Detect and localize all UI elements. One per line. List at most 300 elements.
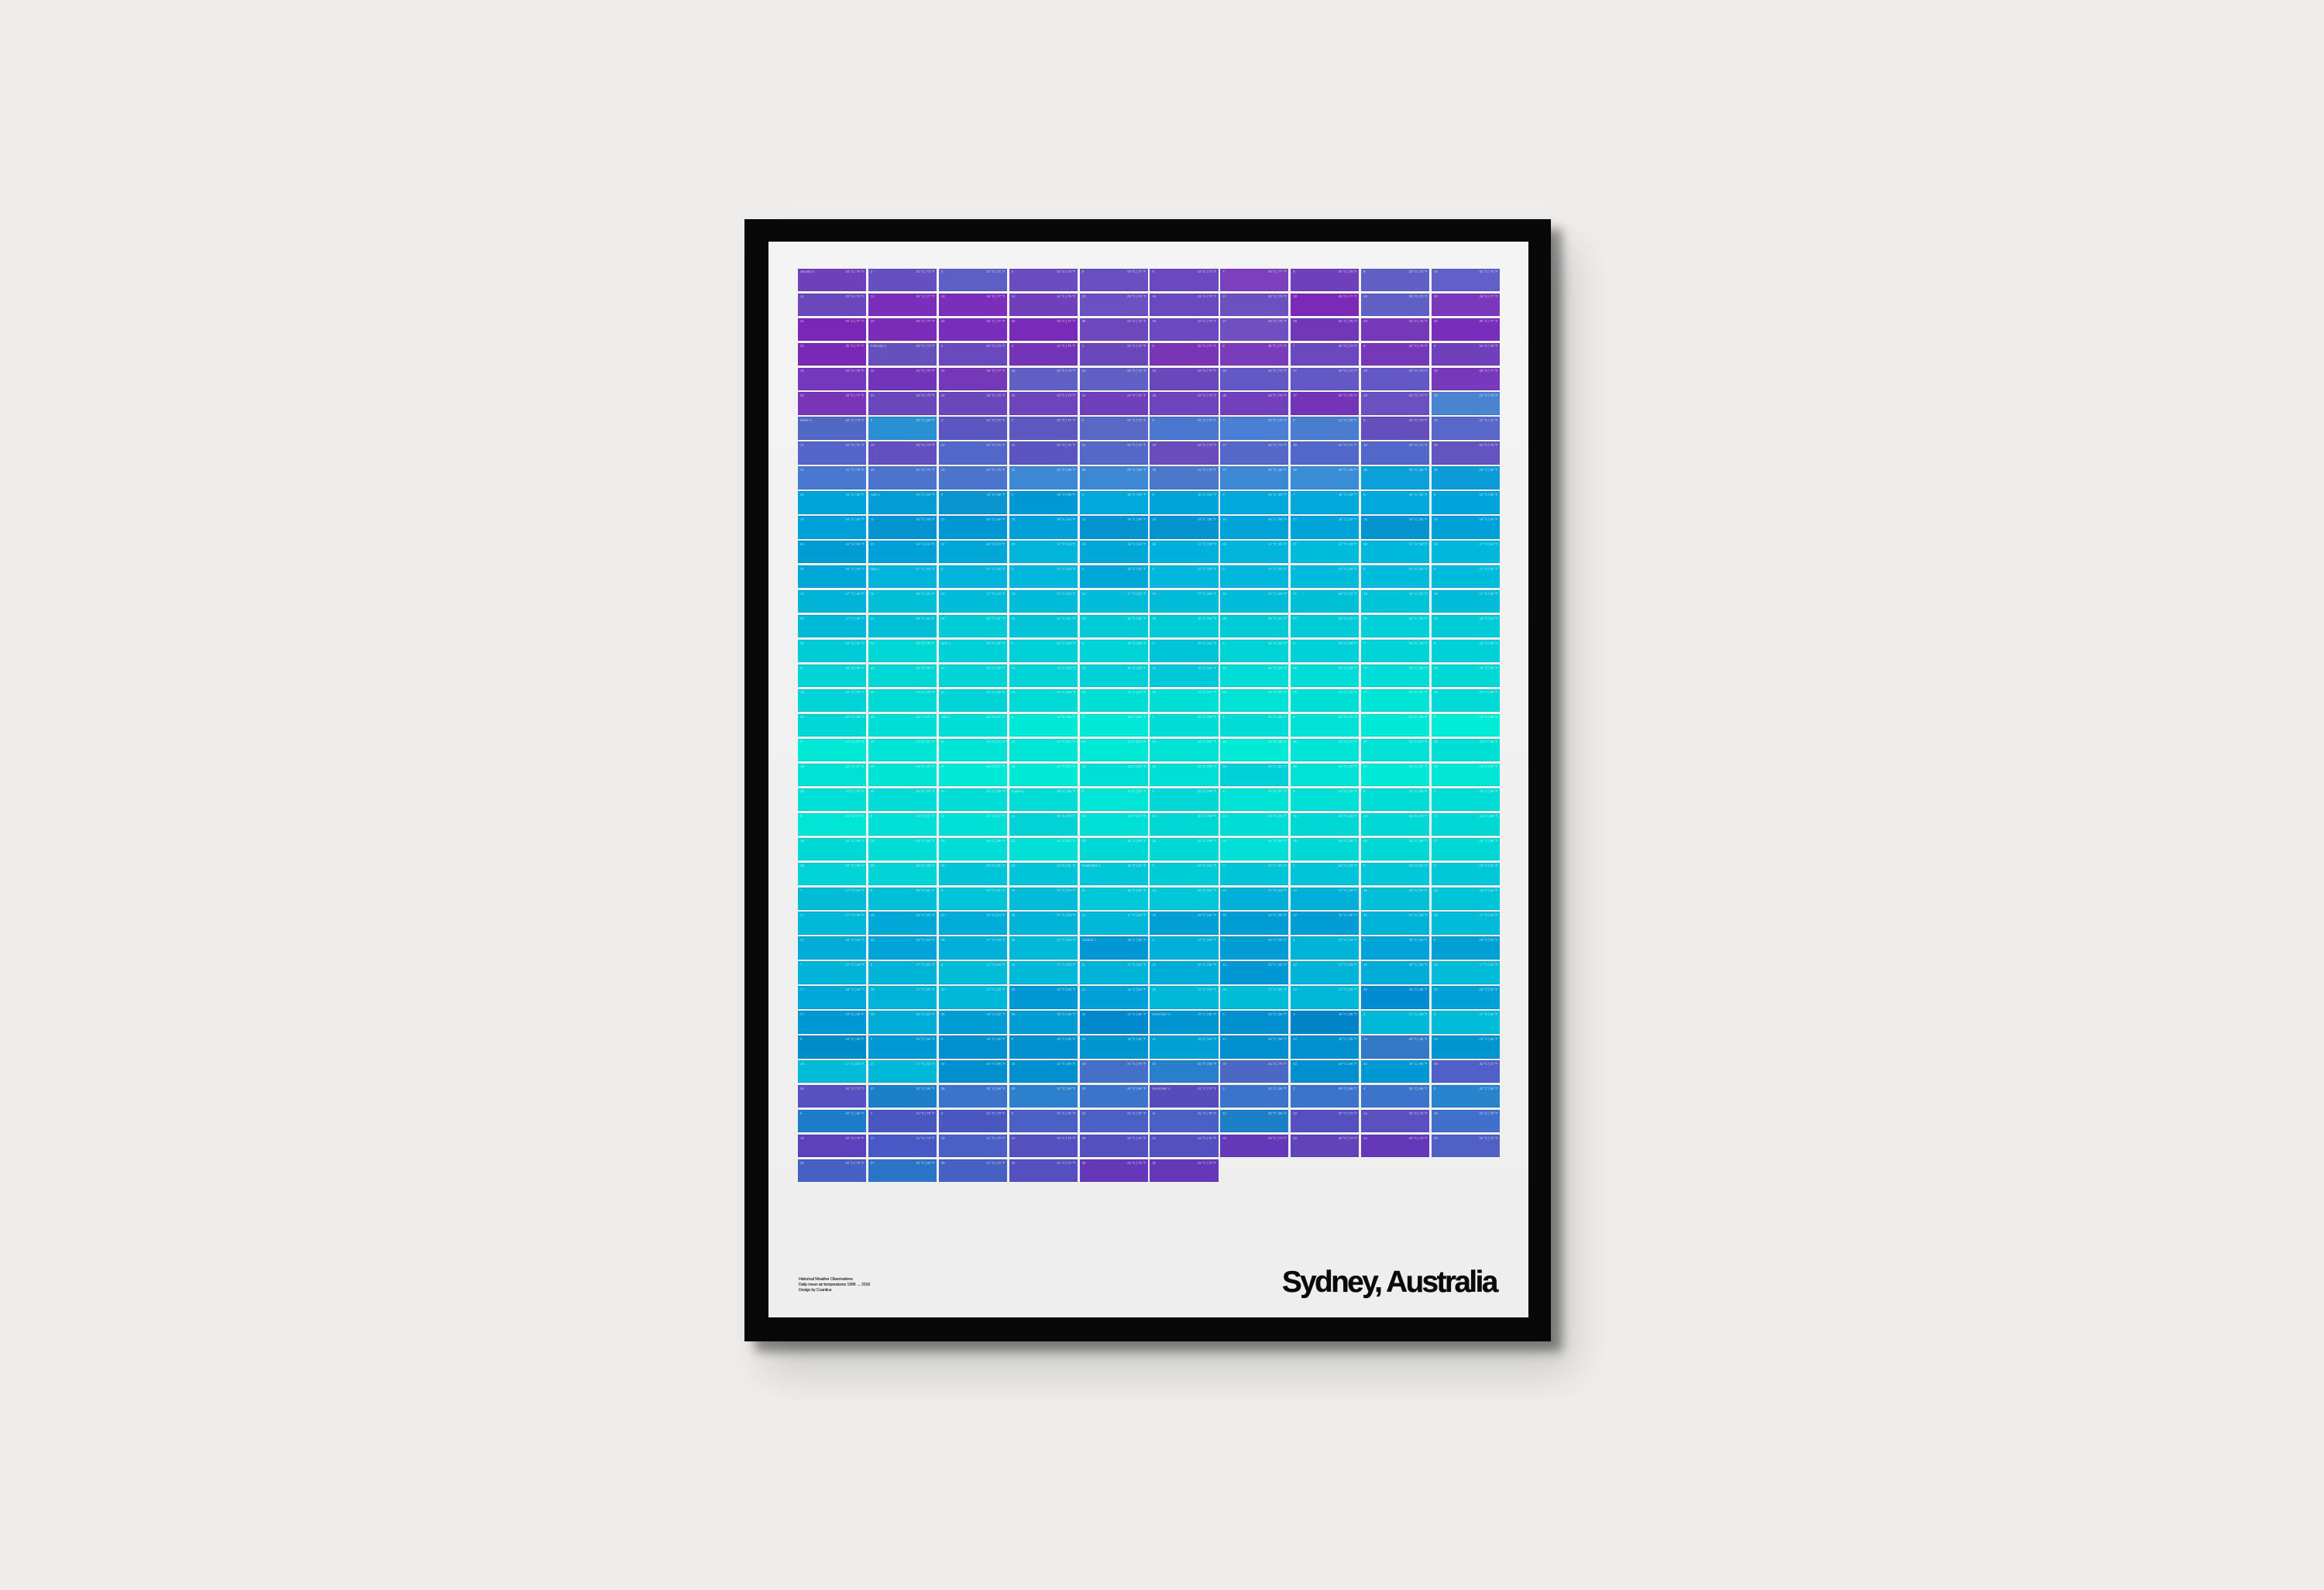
row: November 6-15: 19 °C | 66 °F [1057, 1037, 1075, 1041]
row: August 18-27: 15 °C | 59 °F [986, 839, 1005, 843]
row: January 1-10: 7 [1222, 270, 1225, 273]
row: June 19-28: 27 [1363, 690, 1367, 694]
row: January 31 - February 9: 4 [1082, 344, 1084, 348]
row: March 11-20: 23 °C | 73 °F [1480, 443, 1498, 447]
row: February 10-19: 23 °C | 73 °F [1339, 369, 1357, 373]
row: January 21-30: 23 °C | 73 °F [1127, 319, 1146, 323]
row: December 26-31: 23 °C | 73 °F [1198, 1161, 1216, 1165]
row: May 30 - June 8: 15 °C | 59 °F [1268, 641, 1287, 645]
row: February 20-29: 20 [800, 393, 804, 397]
row: September 17-26: 17 °C | 63 °F [1480, 913, 1498, 917]
row: March 31 - April 9: 18 °C | 64 °F [1409, 493, 1428, 496]
row: December 16-25: 23 °C | 73 °F [1339, 1136, 1357, 1140]
row: November 6-15: 19 °C | 66 °F [846, 1037, 865, 1041]
row: April 10-19: 18 °C | 64 °F [1339, 517, 1357, 521]
row: February 20-29: 23 °C | 73 °F [1409, 393, 1428, 397]
row: May 30 - June 8: 16 °C | 61 °F [846, 641, 865, 645]
row: August 18-27: 15 °C | 59 °F [916, 839, 934, 843]
row: April 30 - May 9: 8 [1363, 567, 1365, 571]
row: May 10-19: 16 °C | 61 °F [1409, 592, 1428, 596]
row: June 9-18: 15 [1222, 666, 1226, 670]
row: October 27 - November 5: 17 °C | 63 °F [1409, 1012, 1428, 1016]
row: April 30 - May 9: 9 [1434, 567, 1435, 571]
row: January 1-10: 22 °C | 72 °F [986, 270, 1005, 273]
row: April 30 - May 9: 5 [1152, 567, 1154, 571]
row: November 16-25: 22 °C | 72 °F [1480, 1062, 1498, 1066]
row: April 10-19: 14 [1082, 517, 1085, 521]
row: November 26 - December 5: 20 °C | 68 °F [1057, 1087, 1075, 1090]
row: March 11-20: 11 [800, 443, 803, 447]
row: December 26-31: 23 °C | 73 °F [1127, 1161, 1146, 1165]
row: December 16-25: 22 °C | 72 °F [1198, 1136, 1216, 1140]
row: January 1-10: 23 °C | 73 °F [916, 270, 934, 273]
row: September 7-16: 16 °C | 61 °F [1198, 888, 1216, 892]
row: March 31 - April 9: 18 °C | 64 °F [846, 493, 865, 496]
row: July 9-18: 14 °C | 57 °F [1339, 740, 1357, 743]
row: August 28 - September 6: 16 °C | 61 °F [1268, 864, 1287, 867]
row: August 28 - September 6: 16 °C | 61 °F [1057, 864, 1075, 867]
row: May 10-19: 11 [871, 592, 874, 596]
row: June 19-28: 14 °C | 57 °F [1339, 690, 1357, 694]
row: March 11-20: 23 °C | 73 °F [1198, 443, 1216, 447]
row: January 21-30: 28 [1293, 319, 1297, 323]
row: July 29 - August 7: 29 [800, 789, 804, 793]
row: April 10-19: 19 °C | 66 °F [1127, 517, 1146, 521]
row: March 21-30: 20 °C | 68 °F [1057, 468, 1075, 472]
row: June 29 - July 8: July 1 [941, 715, 950, 719]
row: March 11-20: 22 °C | 72 °F [1127, 443, 1146, 447]
row: February 20-29: 23 °C | 73 °F [1198, 393, 1216, 397]
row: January 11-20: 17 [1222, 294, 1226, 298]
row: April 20-29: 22 [941, 542, 944, 546]
row: September 27 - October 6: 19 °C | 66 °F [1268, 938, 1287, 942]
row: June 19-28: 20 [871, 690, 875, 694]
row: September 17-26: 26 [1434, 913, 1438, 917]
row: January 11-20: 15 [1082, 294, 1085, 298]
row: October 17-26: 24 [1293, 987, 1297, 991]
row: June 19-28: 15 °C | 59 °F [1480, 690, 1498, 694]
row: December 6-15: 8 [941, 1111, 943, 1115]
row: December 6-15: 6 [800, 1111, 802, 1115]
row: June 19-28: 15 °C | 59 °F [986, 690, 1005, 694]
row: March 31 - April 9: 18 °C | 64 °F [1268, 493, 1287, 496]
row: November 26 - December 5: 2 [1222, 1087, 1225, 1090]
row: May 20-29: 26 [1222, 616, 1226, 620]
row: April 20-29: 17 °C | 63 °F [1339, 542, 1357, 546]
row: February 20-29: 24 [1082, 393, 1085, 397]
row: March 1-10: March 1 [800, 418, 812, 422]
row: December 6-15 [798, 1110, 1500, 1132]
row: September 7-16: 16 °C | 61 °F [1409, 888, 1428, 892]
row: April 20-29: 29 [1434, 542, 1438, 546]
row: February 20-29 [798, 392, 1500, 415]
row: November 16-25: 17 °C | 63 °F [916, 1062, 934, 1066]
row: December 26-31 [798, 1159, 1219, 1182]
row: July 29 - August 7: 14 °C | 57 °F [846, 789, 865, 793]
row: February 20-29: 25 °C | 77 °F [846, 393, 865, 397]
row: August 28 - September 6: 31 [1012, 864, 1015, 867]
row: March 31 - April 9 [798, 491, 1500, 514]
row: April 30 - May 9: 30 [800, 567, 804, 571]
row: December 26-31: 22 °C | 72 °F [1057, 1161, 1075, 1165]
row: January 21-30: 26 [1152, 319, 1156, 323]
row: January 1-10: 8 [1293, 270, 1295, 273]
row: October 7-16: 17 °C | 63 °F [986, 963, 1005, 967]
row: November 6-15: 15 [1434, 1037, 1438, 1041]
row: June 29 - July 8: 30 [871, 715, 875, 719]
row: January 21-30: 30 [1434, 319, 1438, 323]
row: February 10-19: 25 °C | 77 °F [1480, 369, 1498, 373]
row: April 10-19: 19 °C | 66 °F [916, 517, 934, 521]
row: October 7-16 [798, 961, 1500, 984]
row: September 17-26: 18 °C | 64 °F [1198, 913, 1216, 917]
row: April 30 - May 9: 3 [1012, 567, 1013, 571]
row: May 10-19: 14 [1082, 592, 1085, 596]
row: November 6-15: 19 °C | 66 °F [986, 1037, 1005, 1041]
row: October 17-26: 21 [1082, 987, 1085, 991]
row: November 16-25: 19 °C | 66 °F [1339, 1062, 1357, 1066]
row: March 11-20: 12 [871, 443, 875, 447]
row: January 31 - February 9: 25 °C | 77 °F [1198, 344, 1216, 348]
row: February 10-19: 19 [1434, 369, 1438, 373]
row: April 20-29: 17 °C | 63 °F [1057, 542, 1075, 546]
row: June 29 - July 8: 13 °C | 55 °F [1057, 715, 1075, 719]
row: May 20-29: 24 [1082, 616, 1085, 620]
row: April 10-19: 12 [941, 517, 944, 521]
row: September 17-26: 17 °C | 63 °F [1127, 913, 1146, 917]
row: June 19-28 [798, 689, 1500, 712]
credits text block: Historical Weather Observations [799, 1276, 853, 1281]
row: January 21-30: 25 °C | 77 °F [846, 319, 865, 323]
row: October 7-16: 16 [1434, 963, 1438, 967]
row: October 17-26: 26 [1434, 987, 1438, 991]
row: May 30 - June 8: 15 °C | 59 °F [1409, 641, 1428, 645]
row: January 11-20: 25 °C | 77 °F [1339, 294, 1357, 298]
row: November 16-25: 17 °C | 63 °F [846, 1062, 865, 1066]
row: July 29 - August 7: 15 °C | 59 °F [916, 789, 934, 793]
row: July 29 - August 7: 15 °C | 59 °F [986, 789, 1005, 793]
row: October 17-26: 17 °C | 63 °F [1268, 987, 1287, 991]
row: February 20-29: 23 °C | 73 °F [986, 393, 1005, 397]
row: January 31 - February 9: 31 [800, 344, 804, 348]
row: November 26 - December 5: 20 °C | 68 °F [1268, 1087, 1287, 1090]
row: January 11-20: 25 °C | 77 °F [986, 294, 1005, 298]
row: February 10-19: 10 [800, 369, 804, 373]
row: December 26-31: 29 [1012, 1161, 1015, 1165]
row: September 17-26: 24 [1293, 913, 1297, 917]
poster paper [768, 242, 1528, 1317]
row: October 27 - November 5: 19 °C | 66 °F [1268, 1012, 1287, 1016]
row: April 20-29: 17 °C | 63 °F [1198, 542, 1216, 546]
calendar heat grid: 366 daily temperature cells [798, 269, 1500, 1182]
row: December 6-15: 15 [1434, 1111, 1438, 1115]
row: July 19-28: 14 °C | 57 °F [1057, 764, 1075, 768]
row: June 9-18: 15 °C | 59 °F [1409, 666, 1428, 670]
row: July 9-18: 10 [871, 740, 875, 743]
row: January 1-10: 4 [1012, 270, 1013, 273]
row: November 26 - December 5: 27 [871, 1087, 875, 1090]
row: December 16-25: 22 °C | 72 °F [1127, 1136, 1146, 1140]
row: January 11-20: 25 °C | 77 °F [1480, 294, 1498, 298]
row: June 9-18: 15 °C | 59 °F [986, 666, 1005, 670]
row: March 31 - April 9: 9 [1434, 493, 1435, 496]
row: June 29 - July 8: 6 [1293, 715, 1295, 719]
row: December 6-15: 21 °C | 70 °F [1057, 1111, 1075, 1115]
row: August 8-17: 11 [1012, 814, 1015, 818]
row: January 21-30: 25 °C | 77 °F [1480, 319, 1498, 323]
row: July 29 - August 7: 4 [1222, 789, 1225, 793]
row: November 6-15: 19 °C | 66 °F [916, 1037, 934, 1041]
row: November 16-25: 19 [1012, 1062, 1015, 1066]
row: March 11-20: 22 °C | 72 °F [986, 443, 1005, 447]
row: March 1-10: 21 °C | 70 °F [1198, 418, 1216, 422]
row: August 8-17: 16 [1363, 814, 1367, 818]
row: July 29 - August 7 [798, 788, 1500, 811]
row: April 10-19: 19 °C | 66 °F [1198, 517, 1216, 521]
row: March 21-30: 21 [800, 468, 804, 472]
row: October 7-16: 17 °C | 63 °F [1339, 963, 1357, 967]
row: January 11-20: 16 [1152, 294, 1156, 298]
row: December 6-15: 22 °C | 72 °F [1409, 1111, 1428, 1115]
row: January 31 - February 9 [798, 343, 1500, 366]
row: May 10-19: 19 [1434, 592, 1438, 596]
row: June 29 - July 8: 14 °C | 57 °F [1339, 715, 1357, 719]
row: January 21-30: 27 [1222, 319, 1226, 323]
row: September 7-16: 15 [1363, 888, 1367, 892]
row: September 27 - October 6: 18 °C | 64 °F [1409, 938, 1428, 942]
row: October 17-26: 22 [1152, 987, 1156, 991]
row: October 7-16: 19 °C | 66 °F [1268, 963, 1287, 967]
row: August 28 - September 6: 16 °C | 61 °F [1198, 864, 1216, 867]
row: July 9-18: 9 [800, 740, 802, 743]
row: June 19-28: 21 [941, 690, 944, 694]
row: May 30 - June 8: 16 °C | 61 °F [1198, 641, 1216, 645]
row: March 11-20: 19 [1363, 443, 1367, 447]
row: March 11-20: 18 [1293, 443, 1297, 447]
row: November 16-25: 22 [1222, 1062, 1226, 1066]
row: April 30 - May 9: 17 °C | 63 °F [1198, 567, 1216, 571]
row: March 31 - April 9: 6 [1222, 493, 1225, 496]
row: February 20-29: 23 [1012, 393, 1015, 397]
row: October 27 - November 5: 30 [1012, 1012, 1015, 1016]
row: June 9-18: 10 [871, 666, 875, 670]
row: October 7-16: 17 °C | 63 °F [916, 963, 934, 967]
row: December 6-15: 21 °C | 70 °F [986, 1111, 1005, 1115]
row: March 31 - April 9: 19 °C | 66 °F [916, 493, 934, 496]
row: December 6-15: 20 °C | 68 °F [1268, 1111, 1287, 1115]
row: May 30 - June 8: 5 [1222, 641, 1225, 645]
row: September 27 - October 6: October 1 [1082, 938, 1096, 942]
row: September 7-16: 16 °C | 61 °F [1480, 888, 1498, 892]
row: June 9-18: 14 [1152, 666, 1156, 670]
row: January 11-20: 14 [1012, 294, 1015, 298]
row: January 21-30: 25 °C | 77 °F [916, 319, 934, 323]
row: October 27 - November 5: 4 [1363, 1012, 1365, 1016]
row: August 8-17: 14 [1222, 814, 1226, 818]
row: November 26 - December 5: 28 [941, 1087, 944, 1090]
row: August 28 - September 6: 28 [800, 864, 804, 867]
row: September 27 - October 6: 17 °C | 63 °F [1057, 938, 1075, 942]
row: April 10-19: 15 [1152, 517, 1156, 521]
row: September 27 - October 6: 17 °C | 63 °F [1198, 938, 1216, 942]
row: July 19-28 [798, 764, 1500, 786]
row: February 10-19: 18 [1363, 369, 1367, 373]
row: July 9-18: 14 [1152, 740, 1156, 743]
row: March 21-30: 26 [1152, 468, 1156, 472]
row: October 7-16: 9 [941, 963, 943, 967]
row: August 8-17: 15 °C | 59 °F [1409, 814, 1428, 818]
row: August 8-17: 9 [871, 814, 872, 818]
row: August 18-27: 19 [871, 839, 875, 843]
row: August 28 - September 6: 16 °C | 61 °F [1339, 864, 1357, 867]
row: January 1-10: 23 °C | 73 °F [1409, 270, 1428, 273]
row: November 16-25: 18 [941, 1062, 944, 1066]
row: July 29 - August 7: August 1 [1012, 789, 1024, 793]
row: September 17-26: 17 °C | 63 °F [846, 913, 865, 917]
row: April 30 - May 9: 17 °C | 63 °F [1480, 567, 1498, 571]
row: November 6-15: 11 [1152, 1037, 1156, 1041]
row: November 6-15: 10 [1082, 1037, 1085, 1041]
row: December 6-15: 10 [1082, 1111, 1085, 1115]
row: November 26 - December 5: 20 °C | 68 °F [916, 1087, 934, 1090]
row: November 6-15: 13 [1293, 1037, 1297, 1041]
row: April 20-29: 17 °C | 63 °F [1268, 542, 1287, 546]
row: June 19-28: 28 [1434, 690, 1438, 694]
row: January 11-20: 23 °C | 73 °F [1198, 294, 1216, 298]
row: January 31 - February 9: 23 °C | 73 °F [1339, 344, 1357, 348]
row: June 19-28: 26 [1293, 690, 1297, 694]
row: March 1-10: 7 [1222, 418, 1225, 422]
row: November 6-15 [798, 1035, 1500, 1059]
row: December 16-25: 19 [1012, 1136, 1015, 1140]
row: November 26 - December 5: 29 [1012, 1087, 1015, 1090]
row: December 16-25: 23 °C | 73 °F [1268, 1136, 1287, 1140]
row: January 21-30: 24 °C | 75 °F [1409, 319, 1428, 323]
row: June 9-18: 15 °C | 59 °F [1480, 666, 1498, 670]
row: August 18-27: 15 °C | 59 °F [1198, 839, 1216, 843]
row: January 31 - February 9: 3 [1012, 344, 1013, 348]
row: May 30 - June 8: 6 [1293, 641, 1295, 645]
row: September 7-16 [798, 888, 1500, 910]
row: February 20-29: 24 °C | 75 °F [1127, 393, 1146, 397]
row: February 10-19: 23 °C | 73 °F [1198, 369, 1216, 373]
row: September 7-16: 17 °C | 63 °F [1268, 888, 1287, 892]
row: September 7-16: 7 [800, 888, 802, 892]
row: October 17-26: 17 °C | 63 °F [916, 987, 934, 991]
row: August 8-17: 14 °C | 57 °F [1127, 814, 1146, 818]
row: March 21-30: 21 °C | 70 °F [986, 468, 1005, 472]
row: December 6-15: 21 °C | 70 °F [1480, 1111, 1498, 1115]
row: November 6-15: 12 [1222, 1037, 1226, 1041]
row: August 28 - September 6: September 1 [1082, 864, 1101, 867]
row: March 11-20: 20 [1434, 443, 1438, 447]
title: Sydney, Australia [1282, 1265, 1497, 1298]
row: November 16-25: 20 [1082, 1062, 1085, 1066]
row: June 29 - July 8: 13 °C | 55 °F [1480, 715, 1498, 719]
row: June 9-18: 18 [1434, 666, 1438, 670]
row: October 27 - November 5: 19 °C | 66 °F [1057, 1012, 1075, 1016]
row: May 10-19: 17 °C | 63 °F [1268, 592, 1287, 596]
row: September 7-16: 16 °C | 61 °F [986, 888, 1005, 892]
row: November 26 - December 5: 4 [1363, 1087, 1365, 1090]
row: June 29 - July 8: 8 [1434, 715, 1435, 719]
row: July 19-28: 19 [800, 764, 804, 768]
row: October 27 - November 5: 19 °C | 66 °F [1198, 1012, 1216, 1016]
row: October 17-26: 19 [941, 987, 944, 991]
row: May 10-19 [798, 590, 1500, 613]
row: January 11-20: 25 °C | 77 °F [916, 294, 934, 298]
row: December 26-31: 28 [941, 1161, 944, 1165]
row: August 28 - September 6: 16 °C | 61 °F [1409, 864, 1428, 867]
row: September 17-26: 18 °C | 64 °F [916, 913, 934, 917]
row: January 31 - February 9: 8 [1363, 344, 1365, 348]
row: July 9-18: 15 °C | 59 °F [1480, 740, 1498, 743]
row: September 17-26: 19 °C | 66 °F [1268, 913, 1287, 917]
row: March 1-10: 21 °C | 70 °F [1339, 418, 1357, 422]
row: September 17-26: 19 [941, 913, 944, 917]
row: November 6-15: 19 °C | 66 °F [1268, 1037, 1287, 1041]
row: January 11-20: 23 °C | 73 °F [1127, 294, 1146, 298]
row: October 7-16: 18 °C | 64 °F [1198, 963, 1216, 967]
row: April 20-29: 28 [1363, 542, 1367, 546]
row: March 21-30: 22 [871, 468, 875, 472]
row: August 28 - September 6: 15 °C | 59 °F [846, 864, 865, 867]
row: July 9-18: 11 [941, 740, 944, 743]
row: January 1-10: 24 °C | 75 °F [846, 270, 865, 273]
row: September 7-16: 16 °C | 61 °F [916, 888, 934, 892]
row: August 8-17: 15 °C | 59 °F [1339, 814, 1357, 818]
row: August 28 - September 6 [798, 863, 1500, 885]
row: July 19-28: 14 °C | 57 °F [986, 764, 1005, 768]
row: April 20-29: 23 [1012, 542, 1015, 546]
row: December 16-25: 23 °C | 73 °F [1409, 1136, 1428, 1140]
row: September 27 - October 6: 27 [800, 938, 804, 942]
row: November 26 - December 5: 20 °C | 68 °F [1480, 1087, 1498, 1090]
row: August 8-17: 15 °C | 59 °F [1268, 814, 1287, 818]
row: December 16-25: 25 [1434, 1136, 1438, 1140]
row: July 19-28: 20 [871, 764, 875, 768]
row: July 29 - August 7: 3 [1152, 789, 1154, 793]
row: May 30 - June 8: 15 °C | 59 °F [1339, 641, 1357, 645]
row: October 17-26: 18 [871, 987, 875, 991]
row: November 16-25: 19 °C | 66 °F [1409, 1062, 1428, 1066]
row: October 7-16: 15 [1363, 963, 1367, 967]
row: December 26-31: 21 °C | 70 °F [986, 1161, 1005, 1165]
row: September 27 - October 6: 30 [1012, 938, 1015, 942]
row: May 30 - June 8: 4 [1152, 641, 1154, 645]
row: April 10-19: 11 [871, 517, 874, 521]
row: July 9-18: 14 °C | 57 °F [916, 740, 934, 743]
row: October 7-16: 13 [1222, 963, 1226, 967]
row: May 20-29: 22 [941, 616, 944, 620]
row: November 16-25: 25 [1434, 1062, 1438, 1066]
row: May 30 - June 8: 30 [800, 641, 804, 645]
row: February 20-29: 28 [1363, 393, 1367, 397]
row: May 20-29: 16 °C | 61 °F [1127, 616, 1146, 620]
row: January 1-10: 9 [1363, 270, 1365, 273]
row: June 9-18: 16 [1293, 666, 1297, 670]
row: June 29 - July 8: 13 °C | 55 °F [1127, 715, 1146, 719]
row: November 16-25: 21 °C | 70 °F [1268, 1062, 1287, 1066]
row: July 19-28: 26 [1293, 764, 1297, 768]
row: April 30 - May 9: 4 [1082, 567, 1084, 571]
row: August 8-17: 15 [1293, 814, 1297, 818]
row: August 8-17: 10 [941, 814, 944, 818]
row: April 10-19: 19 °C | 66 °F [1409, 517, 1428, 521]
row: August 18-27: 21 [1012, 839, 1015, 843]
row: March 11-20: 14 [1012, 443, 1015, 447]
row: January 1-10: 5 [1082, 270, 1084, 273]
